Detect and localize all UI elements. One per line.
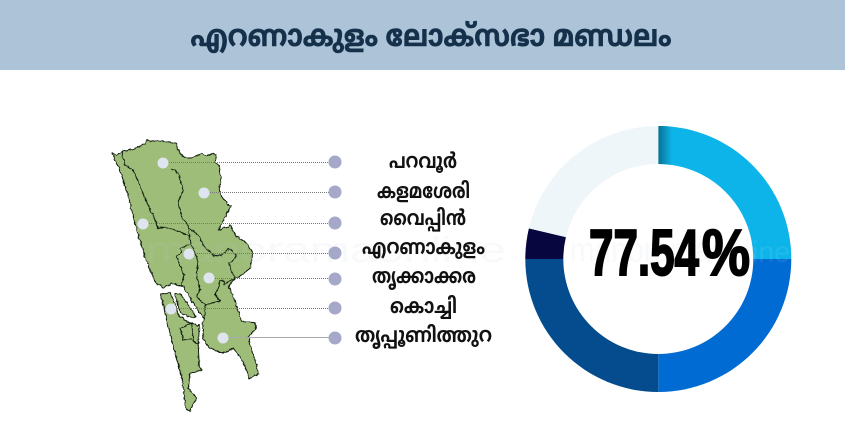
label: Thripunithura: തൃപ്പൂണിത്തുറ	[355, 324, 492, 350]
watermark: manoramaonline	[570, 229, 790, 270]
map: inner boundaries	[122, 152, 236, 345]
watermark over ring: ine	[752, 236, 790, 269]
leader lines	[143, 162, 330, 338]
map: island segment	[161, 293, 202, 411]
segment: gradient edge	[658, 126, 672, 165]
legend dots	[328, 156, 342, 344]
donut chart	[525, 126, 791, 392]
watermark	[146, 229, 790, 270]
map: small island	[175, 293, 196, 318]
map: Ernakulam constituency	[112, 140, 258, 411]
segment: second quarter	[658, 259, 791, 392]
label: Kalamassery: കളമശേരി	[377, 180, 470, 203]
label: Kochi: കൊച്ചി	[390, 295, 457, 319]
turnout digits: 77.54	[589, 216, 699, 289]
map: mainland assembly segments	[112, 140, 258, 379]
header band	[0, 0, 845, 70]
label: Ernakulam: എറണാകുളം	[362, 236, 485, 259]
segment: first quarter	[658, 126, 791, 259]
title: എറണാകുളം ലോക്സഭാ മണ്ഡലം	[190, 20, 672, 53]
label: Paravur: പറവൂർ	[389, 150, 457, 173]
label: Thrikkakara: തൃക്കാക്കര	[372, 265, 476, 290]
segment: dark slice	[525, 228, 566, 259]
segment: remainder	[529, 126, 658, 237]
map location dots	[138, 158, 228, 344]
label: Vypin: വൈപ്പിൻ	[380, 207, 466, 233]
turnout percentage	[589, 216, 750, 289]
segment: third quarter	[525, 259, 658, 392]
constituency labels	[355, 150, 492, 350]
percent sign: %	[702, 216, 750, 289]
watermark: manoramaonline	[146, 229, 506, 270]
